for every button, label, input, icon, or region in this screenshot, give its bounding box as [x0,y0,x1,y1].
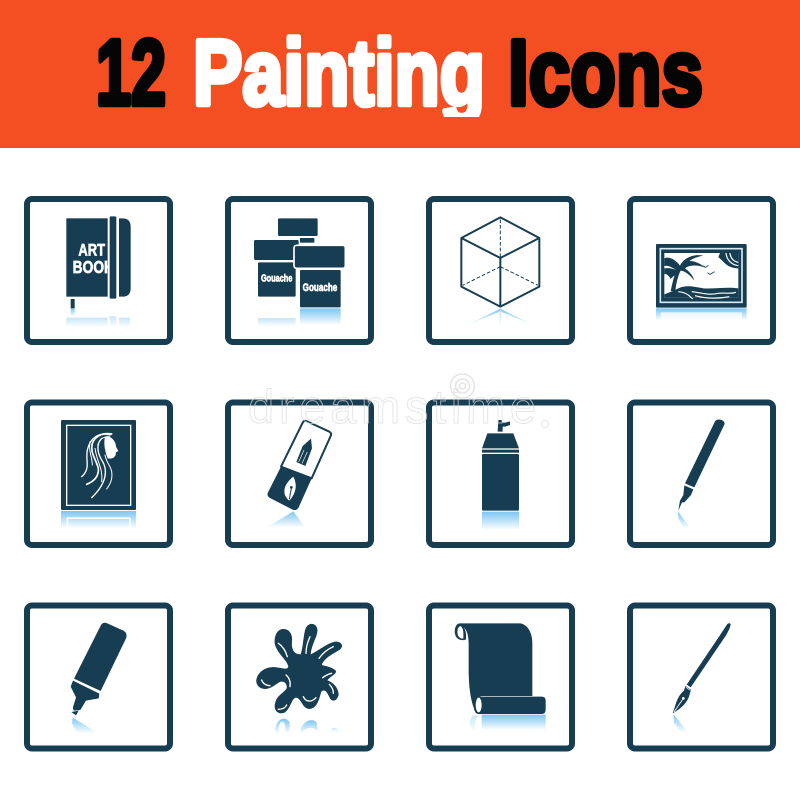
icon: art book: BOOK [73,257,114,277]
panel: art book [27,199,170,342]
icon: gouache jars [254,218,345,327]
panel: paint splash [228,606,371,748]
panel: landscape picture [630,199,773,342]
panel: scroll [429,606,572,748]
title [98,34,702,117]
title: 12 [96,20,166,124]
panel: gouache jars [228,199,371,342]
icon: wireframe cube [461,217,539,327]
icon: art book: ART [78,240,105,259]
icon: art book [66,216,131,327]
panel: spray can [429,402,572,545]
panel: portrait picture [27,402,170,545]
icon: framed palm beach picture [656,244,747,322]
panel: felt pen [630,402,773,545]
icon: spray can [482,420,519,530]
icon: felt pen [678,420,725,528]
icon: eraser [267,421,331,527]
header band [0,0,800,148]
panel: cube [429,199,572,342]
icon: fountain pen brush [673,623,731,733]
panel: fountain pen brush [630,606,773,748]
watermark: dreamstime [248,380,536,433]
panel: highlighter [27,606,170,748]
icon: paper scroll [455,623,546,732]
panel: eraser with pencil and nib [228,402,371,545]
icon: gouache jars: Gouache [303,282,337,294]
icon: highlighter marker [71,623,127,733]
icon: gouache jars: Gouache [261,274,293,285]
title: Icons [508,20,703,124]
title: Painting [193,20,485,124]
icon: framed portrait [61,420,136,528]
icon: paint splash [256,624,342,734]
